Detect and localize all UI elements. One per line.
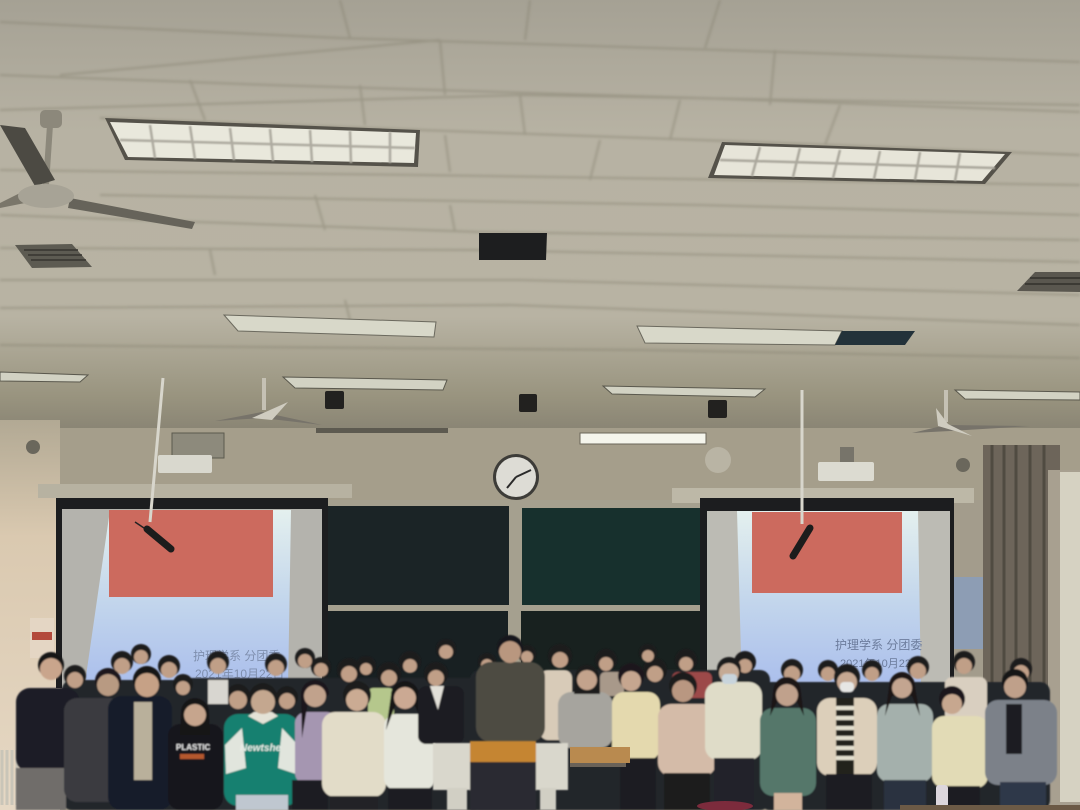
ceiling lights — [0, 118, 1080, 400]
person: girl in cream sweater — [932, 686, 988, 810]
screen housing: top rails — [38, 484, 974, 503]
blackboards — [318, 500, 710, 691]
light: far strips — [0, 372, 1080, 400]
person: girl in grey-green jacket — [877, 672, 933, 810]
person: girl in grey hoodie — [558, 665, 613, 748]
person: girl in beige coat with striped scarf — [817, 664, 877, 810]
projector: left — [158, 433, 224, 473]
slide caption: 护理学系 分团委 — [835, 637, 922, 652]
person: man in dark jacket — [64, 668, 122, 802]
slide title block — [109, 510, 273, 597]
wall lamp globe — [705, 447, 731, 473]
person: girl in peach puffer — [658, 672, 716, 810]
projection screen: right — [700, 498, 954, 691]
light: middle right with missing panel — [637, 326, 915, 345]
person: girl in teal varsity jacket — [224, 683, 299, 810]
foreground: red bag — [697, 801, 753, 810]
light: large right — [708, 142, 1012, 184]
person: girl in cream fleece — [322, 681, 386, 810]
projector: right — [818, 447, 874, 481]
person: man in olive hoodie — [476, 635, 545, 742]
person: girl in PLASTIC hoodie — [168, 698, 223, 810]
back row: visible clothes — [208, 670, 987, 740]
slide caption: 护理学系 分团委 — [193, 648, 280, 663]
foreground: water bottle — [936, 785, 948, 810]
slide caption: 2021年10月22日 — [840, 656, 922, 670]
person: man in grey-blue denim jacket — [985, 669, 1057, 810]
air vents — [15, 244, 1080, 292]
light: middle left — [224, 315, 436, 337]
jacket script lettering: Newtshe — [240, 743, 282, 754]
back row: faces — [67, 645, 1029, 709]
ceiling fixtures — [325, 391, 727, 418]
wall clock — [493, 454, 539, 500]
side table — [570, 747, 630, 767]
slide caption — [193, 648, 284, 681]
slide caption — [835, 637, 922, 670]
person: girl in white jacket — [384, 681, 435, 810]
person: girl in white hoodie with mask — [705, 657, 762, 810]
person: man in black sweater — [16, 652, 80, 810]
person: man in navy coat — [108, 666, 172, 810]
foreground: desk edge — [900, 805, 1080, 810]
ceiling fan: center — [215, 378, 322, 425]
light: large left — [105, 118, 420, 167]
ceiling fan: left — [0, 110, 195, 229]
black ceiling box — [479, 233, 547, 260]
projection screen: left — [56, 498, 328, 690]
person: girl in green shirt dress — [760, 677, 816, 810]
ceiling — [0, 0, 1080, 440]
notice board — [954, 577, 986, 649]
microphone: right — [793, 390, 810, 556]
light: fluorescent tube — [580, 433, 706, 444]
ceiling fan: right — [912, 390, 1030, 436]
hoodie print text: PLASTIC — [176, 743, 210, 752]
podium — [433, 741, 568, 810]
radiator — [2, 750, 17, 805]
back wall — [0, 420, 1080, 810]
back row: hair — [64, 639, 1032, 708]
slide title block — [752, 512, 902, 593]
person: girl in lavender hoodie — [292, 680, 338, 810]
security cameras — [26, 440, 970, 472]
people group — [16, 635, 1057, 810]
wall poster — [30, 618, 54, 658]
back row: dark silhouettes — [62, 670, 1050, 810]
microphone: left — [135, 378, 171, 549]
curtain — [983, 445, 1080, 810]
slide caption: 2021年10月22日 — [195, 667, 284, 681]
person: girl in cream hoodie — [612, 663, 660, 810]
person: student in black blazer — [418, 686, 464, 744]
